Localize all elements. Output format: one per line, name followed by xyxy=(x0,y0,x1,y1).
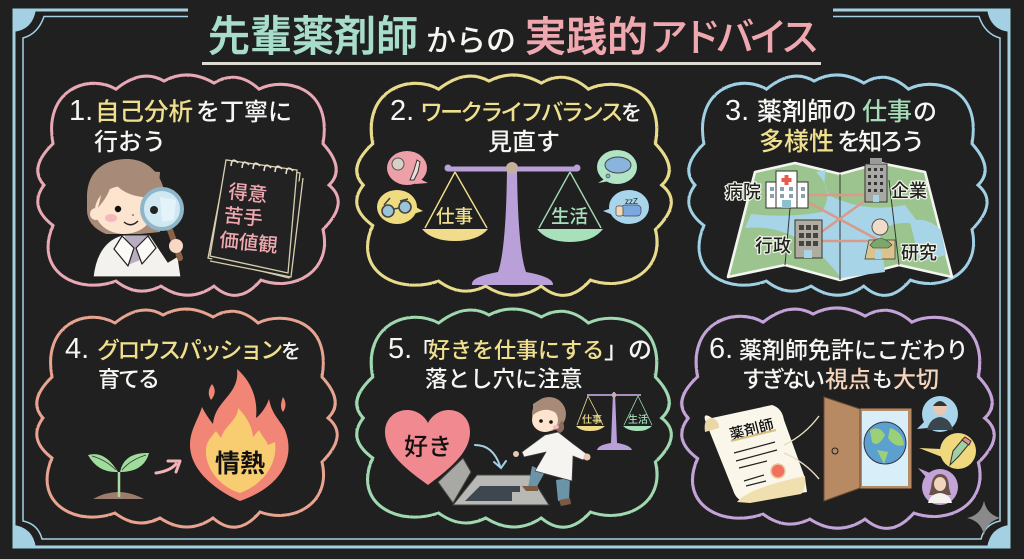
heading 3: 多様性 xyxy=(759,128,834,156)
heading 4: グロウスパッション xyxy=(97,337,282,363)
icon: flame: 情熱 xyxy=(215,450,265,478)
heading 6: 大切 xyxy=(893,366,939,392)
icon: thought bubble xyxy=(597,150,637,184)
panel 3: diversity of pharmacist work xyxy=(689,75,987,295)
panel 2: work life balance xyxy=(357,75,671,295)
icon: notebook xyxy=(208,160,303,278)
icon: government building xyxy=(795,220,822,258)
icon: small balance scale xyxy=(576,392,652,450)
icon: license scroll: 薬剤師 xyxy=(728,416,776,444)
heading 3: を知ろう xyxy=(837,129,922,156)
icon: balance scale: 生活 xyxy=(551,206,588,227)
icon: heart: 好き xyxy=(404,434,452,461)
heading 1: 1. xyxy=(69,95,93,127)
heading 4: 育てる xyxy=(98,367,158,392)
heading 4: を xyxy=(281,340,301,363)
icon: sprout xyxy=(88,453,149,499)
icon: notebook: 苦手 xyxy=(223,205,264,231)
title: アドバイス xyxy=(649,17,817,60)
sparkle mark xyxy=(967,501,1001,535)
icon: balance scale xyxy=(422,162,603,285)
title: 実践的 xyxy=(525,14,648,60)
icon: hospital xyxy=(766,171,808,208)
heading 2: を xyxy=(621,102,642,125)
heading 5: 5. xyxy=(388,333,412,365)
heading 5: 」の xyxy=(604,337,652,364)
title: からの xyxy=(426,25,516,58)
heading 3: 3. xyxy=(725,95,749,127)
heading 1: 行おう xyxy=(94,129,166,156)
icon: pharmacist with magnifier xyxy=(87,159,183,277)
heading 2: 2. xyxy=(390,95,414,127)
heading 6: 視点 xyxy=(825,366,871,392)
map labels: 研究 xyxy=(901,243,937,263)
title: 先輩薬剤師 xyxy=(208,13,418,60)
icon: researcher xyxy=(865,219,895,259)
icon: notebook: 得意 xyxy=(227,181,268,207)
connecting lines xyxy=(806,195,880,241)
icon: glasses bubble xyxy=(377,190,423,224)
map labels: 企業 xyxy=(891,181,927,201)
icon: woman bubble xyxy=(918,468,958,505)
icon: stepping pharmacist xyxy=(513,397,590,506)
heading 5: 好きを仕事にする xyxy=(428,338,604,363)
icon: company building xyxy=(865,158,887,202)
panel 6: not only the pharmacist license xyxy=(682,308,994,528)
arrow xyxy=(475,445,506,468)
icon: small balance scale: 生活 xyxy=(628,413,648,426)
rays xyxy=(784,416,819,479)
heading 6: すぎない xyxy=(742,366,824,392)
icon: sleep bubble xyxy=(603,190,649,224)
heading 3: 薬剤師の xyxy=(757,98,857,126)
icon: sleep bubble: zzZ xyxy=(625,197,638,206)
icon: flame xyxy=(190,369,289,501)
icon: balance scale: 仕事 xyxy=(436,206,473,227)
panel 5: pitfall of doing what you love xyxy=(357,309,671,527)
map labels: 病院 xyxy=(725,182,761,202)
icon: trapdoor xyxy=(438,458,549,505)
heading 5: 「 xyxy=(411,340,432,363)
heading 6: 6. xyxy=(709,333,733,365)
panel 4: growth passion xyxy=(37,309,337,527)
arrow xyxy=(156,461,180,473)
icon: hobby bubble xyxy=(387,151,428,185)
title xyxy=(202,13,821,65)
map labels: 行政 xyxy=(755,236,791,256)
icon: colleague bubble xyxy=(917,396,958,432)
icon: heart xyxy=(385,410,470,485)
icon: pencil bubble xyxy=(919,433,976,469)
icon: license scroll xyxy=(705,405,807,503)
icon: open door with globe xyxy=(824,397,912,501)
heading 5: 落とし穴に注意 xyxy=(425,367,583,392)
map xyxy=(728,163,952,280)
icon: small balance scale: 仕事 xyxy=(582,413,602,426)
heading 6: も xyxy=(872,369,893,392)
icon: notebook: 価値観 xyxy=(218,229,279,257)
panel 1: self analysis xyxy=(38,75,338,295)
heading 1: を丁寧に xyxy=(196,99,292,126)
heading 2: 見直す xyxy=(488,129,560,156)
heading 3: 仕事 xyxy=(862,98,912,126)
heading 6: 薬剤師免許にこだわり xyxy=(739,337,969,363)
heading 2: ワークライフバランス xyxy=(420,99,621,125)
heading 4: 4. xyxy=(65,333,89,365)
heading 3: の xyxy=(913,99,937,126)
heading 1: 自己分析 xyxy=(95,98,193,126)
